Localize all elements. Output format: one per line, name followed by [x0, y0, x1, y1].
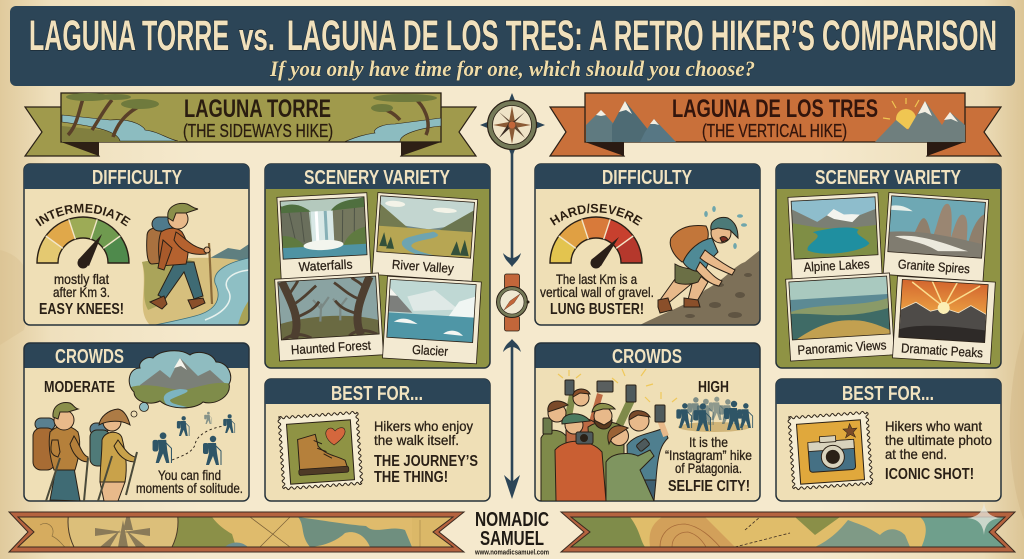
sparkle watermark — [967, 502, 1001, 535]
icon: wrist watch — [496, 274, 530, 331]
text: the journey's: THE JOURNEY’S — [374, 453, 478, 470]
subtitle: If you only have time for one, which should you choose? — [269, 56, 755, 81]
heading: CROWDS — [612, 346, 682, 368]
text: it is the: It is the — [689, 434, 728, 450]
footer map ribbon: right — [561, 512, 1021, 552]
ribbon: Laguna de los Tres — [550, 93, 1001, 156]
icon: stamp with boot and heart — [278, 411, 363, 490]
text: selfie city: SELFIE CITY! — [668, 478, 750, 495]
photo: waterfalls — [277, 193, 371, 279]
heading: BEST FOR... — [331, 383, 423, 405]
heading: BEST FOR... — [842, 383, 934, 405]
icon: stamp with camera — [788, 411, 873, 490]
photo: alpine lakes — [788, 193, 882, 279]
illustration: gravel slope — [640, 250, 760, 325]
gauge: intermediate: INTERMEDIATE — [35, 204, 131, 226]
text: hikers who enjoy: Hikers who enjoy — [374, 418, 473, 434]
panel: Laguna Torre scenery — [265, 164, 490, 368]
photo: haunted forest: Haunted Forest — [291, 337, 372, 357]
text: mostly flat: mostly flat — [54, 271, 109, 287]
photo: waterfalls: Waterfalls — [298, 257, 353, 274]
ribbon subheading: (THE VERTICAL HIKE) — [702, 121, 847, 141]
ribbon scene: mountains and sun — [586, 98, 965, 142]
panel: Laguna Torre crowds — [24, 343, 249, 501]
text: vertical wall of gravel: vertical wall of gravel. — [540, 284, 654, 300]
icon: compass — [480, 93, 545, 157]
panel: Laguna de los Tres crowds — [535, 343, 760, 501]
panel: Laguna Torre best for — [265, 379, 490, 501]
text: moderate: MODERATE — [44, 379, 115, 396]
ribbon scene: river and trees — [62, 93, 441, 142]
icon: hiker walking — [147, 204, 212, 309]
text: lung buster: LUNG BUSTER! — [550, 301, 644, 318]
heading: SCENERY VARIETY — [304, 167, 451, 189]
icon: selfie crowd — [541, 369, 677, 501]
thought bubble — [128, 351, 235, 417]
photo: haunted forest — [275, 273, 383, 361]
footer logo — [474, 509, 549, 556]
title: vs. — [239, 17, 275, 59]
photo: alpine lakes: Alpine Lakes — [803, 256, 870, 275]
text: high: HIGH — [698, 379, 729, 396]
heading: SCENERY VARIETY — [815, 167, 962, 189]
photo: granite spires: Granite Spires — [897, 256, 971, 276]
footer logo: www.nomadicsamuel.com — [474, 550, 549, 556]
photo: dramatic peaks — [893, 276, 995, 364]
text: moments of solitude: moments of solitude. — [136, 480, 243, 496]
text: hikers who want: Hikers who want — [885, 418, 982, 434]
text: at the end: at the end. — [885, 446, 947, 462]
panel: Laguna de los Tres scenery — [776, 164, 1001, 368]
heading: DIFFICULTY — [92, 167, 183, 189]
photo: river valley — [372, 193, 478, 281]
text: of patagonia: of Patagonia. — [675, 460, 742, 476]
text: easy knees: EASY KNEES! — [39, 301, 124, 318]
ribbon: Laguna Torre — [25, 93, 476, 156]
illustration: riverside ground — [142, 244, 249, 326]
centre timeline arrows — [503, 152, 521, 499]
photo: panoramic views: Panoramic Views — [797, 337, 887, 358]
text: instagram hike: “Instagram” hike — [665, 447, 752, 463]
gauge: hard severe — [549, 204, 643, 268]
text: the ultimate photo: the ultimate photo — [885, 432, 992, 448]
icon: hiker climbing — [658, 206, 747, 313]
footer logo: NOMADIC — [475, 509, 549, 531]
text: the walk itself: the walk itself. — [374, 432, 459, 448]
text: the last km: The last Km is a — [556, 271, 637, 287]
text: you can find: You can find — [158, 467, 221, 483]
ribbon heading: LAGUNA DE LOS TRES — [672, 95, 878, 123]
title banner — [10, 6, 1015, 86]
heading: DIFFICULTY — [602, 167, 693, 189]
photo: glacier: Glacier — [412, 342, 449, 359]
footer map ribbon: left — [8, 512, 466, 552]
panel: Laguna de los Tres best for — [776, 379, 1001, 501]
photo: river valley: River Valley — [391, 257, 455, 276]
panel: Laguna Torre difficulty — [23, 163, 250, 326]
icon: two hikers — [33, 403, 137, 501]
text: after Km 3: after Km 3. — [53, 284, 110, 300]
panel: Laguna de los Tres difficulty — [534, 163, 761, 326]
icon: silhouette crowd — [676, 397, 753, 432]
gauge: hard severe: HARD/SEVERE — [550, 204, 642, 226]
heading: CROWDS — [55, 346, 124, 368]
text: the thing: THE THING! — [374, 469, 448, 486]
photo: dramatic peaks: Dramatic Peaks — [901, 340, 984, 360]
ribbon subheading: (THE SIDEWAYS HIKE) — [183, 121, 333, 141]
photo: granite spires — [883, 193, 989, 281]
gauge: intermediate — [35, 204, 131, 268]
footer logo: SAMUEL — [480, 528, 544, 550]
ribbon heading: LAGUNA TORRE — [184, 95, 331, 123]
icon: spread out hikers on dotted trail — [153, 412, 235, 465]
photo: glacier — [383, 276, 481, 364]
text: iconic shot: ICONIC SHOT! — [885, 466, 974, 483]
title: LAGUNA TORRE — [29, 12, 229, 60]
photo: panoramic views — [786, 273, 894, 361]
